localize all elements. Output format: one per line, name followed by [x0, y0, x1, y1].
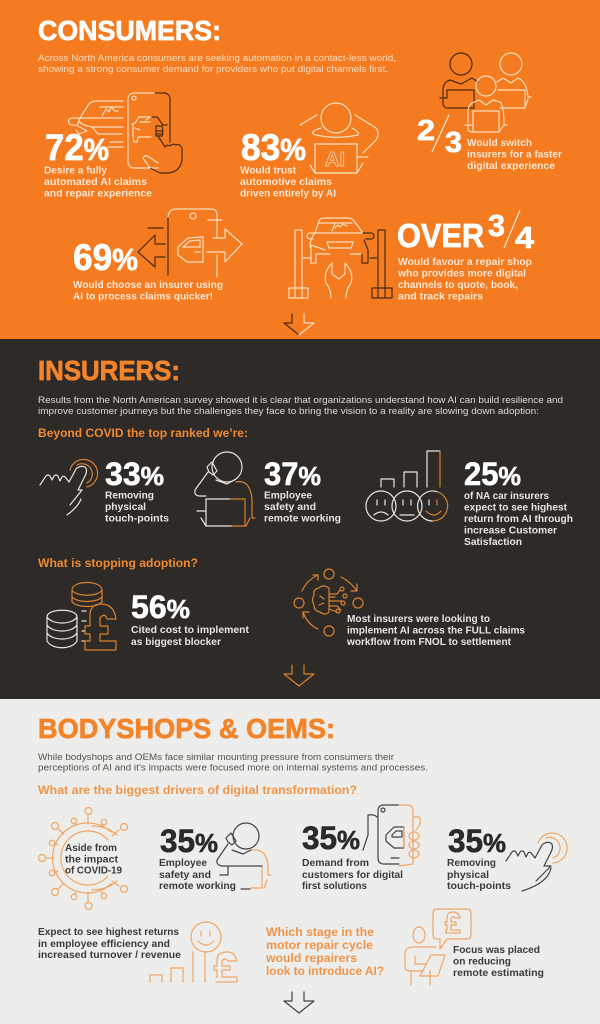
- stat: 33%: [105, 456, 169, 524]
- stat: customer demand: [302, 820, 403, 892]
- stat: two thirds: 3: [445, 127, 462, 159]
- covid label: of COVID-19: [65, 866, 122, 876]
- stat: 33%: touch-points: [105, 514, 169, 524]
- stat: two thirds: insurers for a faster: [467, 150, 562, 160]
- text: expected returns: Expect to see highest returns: [38, 927, 179, 938]
- insurers workflow text: workflow from FNOL to settlement: [346, 637, 512, 648]
- insurers intro text: Results from the North American survey showed it is clear that organizations understand how AI can build resilience and: [38, 395, 563, 405]
- stat: 56%: as biggest blocker: [131, 637, 221, 648]
- consumers intro text: [38, 53, 396, 74]
- stat: touch points: 35%: [448, 823, 506, 859]
- stat: 37%: remote working: [264, 514, 341, 524]
- subheading: beyond covid: Beyond COVID the top ranked we’re:: [38, 428, 248, 440]
- stat: two thirds: 2: [417, 115, 435, 147]
- insurers workflow text: implement AI across the FULL claims: [347, 626, 525, 636]
- text: remote estimating: on reducing: [453, 956, 511, 968]
- stat: customer demand: 35%: [302, 820, 360, 856]
- text: expected returns: increased turnover / revenue: [38, 950, 181, 961]
- bodyshops intro text: While bodyshops and OEMs face similar mounting pressure from consumers their: [38, 752, 394, 762]
- stat: over three quarters: [397, 208, 535, 302]
- icon: hand holding phone: [363, 805, 420, 866]
- question: motor repair: look to introduce AI?: [266, 966, 384, 978]
- question: motor repair: Which stage in the: [266, 927, 374, 939]
- stat: touch points: touch-points: [447, 881, 511, 892]
- stat: 83%: [240, 127, 336, 200]
- arrow: down to bodyshops: [284, 665, 314, 686]
- stat: customer demand: Demand from: [302, 858, 369, 869]
- stat: employee safety: Employee: [159, 858, 207, 869]
- text: expected returns: [38, 927, 181, 961]
- stat: 72%: [44, 127, 152, 200]
- covid label: [65, 843, 122, 876]
- stat: over three quarters: OVER: [397, 217, 484, 254]
- stat: 25%: return from AI through: [464, 514, 573, 525]
- stat: 25%: increase Customer: [464, 526, 557, 536]
- icon: touch hand: [40, 459, 98, 515]
- panel: consumers: [0, 0, 600, 339]
- icon: person with AI laptop: AI: [325, 149, 345, 171]
- insurers intro text: [38, 395, 563, 416]
- stat: 37%: Employee: [264, 490, 312, 502]
- insurers workflow text: [346, 614, 525, 648]
- stat: 37%: safety and: [264, 502, 316, 513]
- stat: customer demand: customers for digital: [302, 870, 403, 881]
- icon: person on phone with laptop: [195, 452, 255, 526]
- stat: over three quarters: 4: [515, 220, 535, 255]
- icon: car and phone with hand: [69, 93, 182, 173]
- stat: over three quarters: channels to quote, book,: [398, 280, 518, 291]
- stat: 69%: Would choose an insurer using: [73, 280, 223, 291]
- consumers intro text: Across North America consumers are seeking automation in a contact-less world,: [38, 53, 396, 63]
- stat: over three quarters: Would favour a repair shop: [398, 257, 532, 268]
- stat: two thirds: digital experience: [467, 161, 555, 172]
- arrow: down to insurers: [284, 314, 314, 335]
- icon: person with AI laptop: [300, 103, 378, 173]
- heading: insurers: INSURERS:: [38, 355, 180, 386]
- heading: consumers: CONSUMERS:: [38, 15, 221, 46]
- stat: over three quarters: and track repairs: [398, 292, 483, 302]
- stat: 69%: AI to process claims quicker!: [73, 292, 213, 302]
- stat: 25%: Satisfaction: [464, 537, 522, 548]
- stat: employee safety: remote working: [159, 881, 236, 892]
- text: remote estimating: Focus was placed: [453, 945, 540, 956]
- stat: 25%: of NA car insurers: [464, 491, 549, 502]
- stat: 72%: Desire a fully: [44, 166, 107, 176]
- insurers workflow text: Most insurers were looking to: [347, 614, 490, 625]
- stat: 33%: physical: [105, 502, 146, 513]
- icon: virus ring: [38, 808, 128, 910]
- icon: person with quote bubble: [405, 909, 471, 985]
- stat: 83%: automotive claims: [240, 177, 332, 188]
- stat: employee safety: safety and: [159, 870, 211, 881]
- heading: bodyshops and OEMs: BODYSHOPS & OEMS:: [38, 713, 335, 744]
- text: remote estimating: [453, 945, 544, 979]
- question: motor repair: motor repair cycle: [266, 940, 373, 952]
- stat: customer demand: first solutions: [302, 881, 367, 892]
- stat: 72%: automated AI claims: [44, 177, 147, 188]
- subheading: stopping adoption: What is stopping adoption?: [38, 558, 198, 570]
- stat: 83%: 83%: [241, 127, 306, 168]
- stat: 25%: [464, 456, 573, 548]
- stat: two thirds: Would switch: [467, 138, 532, 149]
- question: motor repair: [265, 927, 384, 978]
- icon: bars and faces: [366, 451, 448, 521]
- stat: 37%: [264, 456, 341, 524]
- icon: AI brain cycle: [294, 569, 363, 636]
- stat: 72%: 72%: [45, 127, 109, 168]
- icon: car on lift with wrench: [289, 218, 392, 298]
- stat: 56%: [131, 589, 250, 648]
- stat: 69%: [73, 237, 223, 302]
- stat: two thirds: [417, 115, 562, 172]
- icon: phone with car door and arrows: [138, 209, 242, 277]
- stat: 83%: Would trust: [240, 166, 297, 176]
- subheading: digital drivers: What are the biggest drivers of digital transformation?: [38, 785, 357, 797]
- text: expected returns: in employee efficiency and: [38, 939, 170, 950]
- panel: insurers: [0, 339, 600, 699]
- stat: 25%: 25%: [464, 456, 521, 492]
- covid label: Aside from: [65, 843, 117, 854]
- stat: 56%: Cited cost to implement: [131, 625, 250, 636]
- stat: touch points: [447, 823, 511, 892]
- stat: employee safety: [159, 823, 236, 892]
- icon: person on phone: [217, 823, 271, 889]
- arrow: down at bottom: [284, 992, 314, 1013]
- stat: touch points: physical: [447, 870, 489, 881]
- stat: 37%: 37%: [264, 456, 321, 492]
- stat: 72%: and repair experience: [44, 188, 152, 200]
- insurers intro text: improve customer journeys but the challenges they face to bring the vision to a reality are slowing down adoption:: [38, 406, 539, 416]
- panel: bodyshops and OEMs: [0, 699, 600, 1024]
- stat: 33%: 33%: [105, 456, 164, 492]
- icon: smiley bars and pound: [150, 922, 237, 982]
- stat: 33%: Removing: [105, 490, 154, 502]
- stat: 69%: 69%: [73, 237, 138, 278]
- bodyshops intro text: [38, 752, 428, 772]
- question: motor repair: would repairers: [265, 953, 357, 965]
- icon: touch hand dark: [506, 833, 567, 891]
- stat: 83%: driven entirely by AI: [240, 188, 336, 200]
- stat: touch points: Removing: [447, 858, 496, 869]
- stat: 56%: 56%: [131, 589, 190, 625]
- stat: 25%: expect to see highest: [464, 502, 568, 514]
- covid label: the impact: [65, 854, 119, 866]
- stat: over three quarters: who provides more digital: [397, 268, 526, 280]
- stat: employee safety: 35%: [160, 823, 218, 859]
- stat: over three quarters: 3: [488, 208, 505, 243]
- text: remote estimating: remote estimating: [453, 968, 544, 979]
- icon: three people with laptops: [440, 53, 531, 132]
- consumers intro text: showing a strong consumer demand for providers who put digital channels first.: [38, 64, 388, 74]
- icon: coins and pound: [47, 582, 116, 650]
- bodyshops intro text: perceptions of AI and it’s impacts were focused more on internal systems and processes.: [38, 762, 428, 772]
